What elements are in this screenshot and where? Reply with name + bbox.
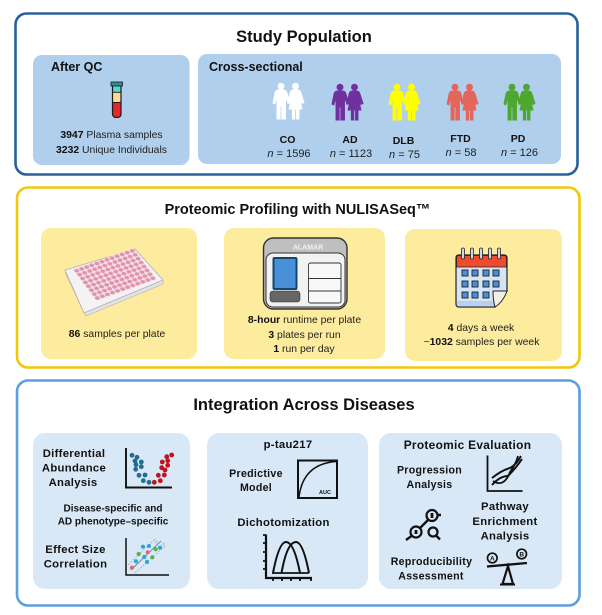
text: differential abundance analysis bbox=[42, 448, 106, 489]
text: run parameters: 3 plates per run bbox=[268, 330, 341, 341]
heading: integration across diseases: Integration Across Diseases bbox=[193, 396, 415, 414]
group: FTD: n = 58 bbox=[446, 147, 476, 159]
card: plate bbox=[41, 228, 197, 359]
group: AD: AD bbox=[342, 134, 358, 146]
chart: correlation scatter bbox=[126, 538, 169, 575]
text: run parameters bbox=[248, 315, 361, 355]
text: sample counts: 3947 Plasma samples bbox=[60, 130, 163, 141]
group: PD bbox=[501, 84, 538, 159]
icon: blood tube bbox=[111, 82, 122, 118]
icon: calendar bbox=[456, 248, 507, 307]
text: reproducibility assessment: Assessment bbox=[398, 570, 464, 582]
text: progression analysis bbox=[397, 464, 462, 491]
text: differential abundance analysis: Abundance bbox=[42, 462, 106, 474]
group: CO: n = 1596 bbox=[267, 148, 311, 160]
heading: proteomic evaluation: Proteomic Evaluation bbox=[404, 438, 531, 452]
icon: balance scale: B bbox=[519, 552, 524, 558]
text: effect size correlation bbox=[44, 544, 107, 570]
heading: p-tau217: p-tau217 bbox=[264, 439, 312, 451]
icon: balance scale: A bbox=[490, 556, 495, 562]
chart: volcano plot bbox=[126, 448, 174, 488]
icon: Alamar instrument: ALAMAR bbox=[293, 244, 323, 252]
panel: proteomic profiling bbox=[17, 188, 580, 368]
icon: balance scale bbox=[487, 549, 527, 584]
text: run parameters: 8-hour runtime per plate bbox=[248, 315, 361, 326]
heading: after QC: After QC bbox=[51, 60, 102, 74]
chart: AUC curve bbox=[298, 460, 337, 498]
text: dichotomization: Dichotomization bbox=[237, 517, 330, 529]
text: weekly throughput bbox=[424, 323, 540, 348]
heading: study population: Study Population bbox=[236, 28, 372, 46]
card: cross-sectional bbox=[198, 54, 561, 164]
text: reproducibility assessment bbox=[391, 556, 472, 582]
card: instrument bbox=[224, 228, 385, 359]
text: disease-specific note bbox=[58, 504, 169, 528]
card: differential abundance bbox=[33, 433, 190, 589]
heading: proteomic profiling: Proteomic Profiling with NULISASeq™ bbox=[165, 202, 430, 218]
text: predictive model: Model bbox=[240, 482, 272, 494]
text: progression analysis: Progression bbox=[397, 464, 462, 476]
group: PD: n = 126 bbox=[501, 147, 538, 159]
group: DLB bbox=[389, 84, 420, 161]
group: CO: CO bbox=[280, 134, 295, 146]
group: DLB: DLB bbox=[393, 135, 415, 147]
group: AD: n = 1123 bbox=[330, 148, 372, 160]
text: pathway enrichment analysis: Analysis bbox=[481, 530, 529, 542]
text: reproducibility assessment: Reproducibility bbox=[391, 556, 472, 568]
group: FTD bbox=[446, 84, 478, 159]
heading: cross-sectional: Cross-sectional bbox=[209, 60, 303, 74]
text: progression analysis: Analysis bbox=[407, 479, 452, 491]
group: PD: PD bbox=[511, 133, 526, 145]
card: p-tau217 bbox=[207, 433, 368, 589]
chart: AUC curve: AUC bbox=[319, 490, 331, 496]
text: samples per plate: 86 samples per plate bbox=[69, 329, 165, 340]
text: weekly throughput: 4 days a week bbox=[448, 323, 515, 334]
text: pathway enrichment analysis bbox=[472, 501, 538, 542]
text: sample counts bbox=[56, 130, 167, 156]
chart: overlapping distributions bbox=[263, 534, 312, 581]
text: predictive model: Predictive bbox=[229, 468, 283, 480]
text: differential abundance analysis: Differential bbox=[43, 448, 105, 460]
group: FTD: FTD bbox=[450, 133, 471, 145]
text: disease-specific note: AD phenotype–specific bbox=[58, 516, 169, 528]
panel: study population bbox=[16, 14, 578, 174]
chart: progression lines bbox=[488, 456, 522, 491]
text: predictive model bbox=[229, 468, 283, 494]
icon: pathway enrichment bbox=[406, 510, 441, 540]
text: disease-specific note: Disease-specific and bbox=[64, 504, 162, 514]
card: proteomic evaluation bbox=[379, 433, 562, 589]
card: after QC bbox=[33, 55, 190, 165]
group: AD bbox=[330, 84, 372, 160]
text: effect size correlation: Correlation bbox=[44, 558, 107, 570]
text: sample counts: 3232 Unique Individuals bbox=[56, 145, 167, 156]
text: run parameters: 1 run per day bbox=[273, 344, 335, 355]
group: DLB: n = 75 bbox=[389, 149, 420, 161]
text: weekly throughput: ~1032 samples per week bbox=[424, 337, 540, 348]
text: pathway enrichment analysis: Enrichment bbox=[472, 516, 538, 528]
text: differential abundance analysis: Analysis bbox=[49, 477, 97, 489]
text: effect size correlation: Effect Size bbox=[45, 544, 106, 556]
panel: integration across diseases bbox=[17, 380, 580, 606]
icon: Alamar instrument bbox=[264, 238, 347, 309]
card: schedule bbox=[405, 229, 562, 361]
text: pathway enrichment analysis: Pathway bbox=[481, 501, 529, 513]
group: CO bbox=[267, 83, 311, 160]
icon: 96-well plate bbox=[65, 248, 163, 316]
